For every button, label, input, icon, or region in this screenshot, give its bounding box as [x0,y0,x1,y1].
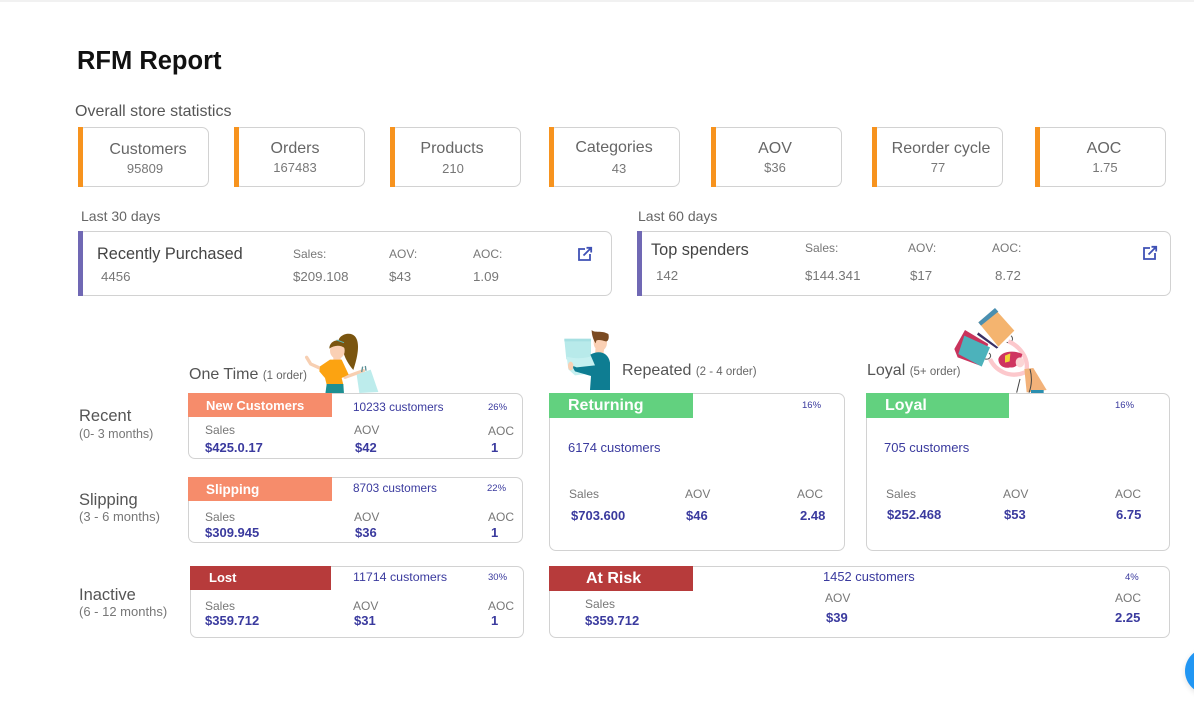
panel: loyal: 16% [1115,400,1134,411]
illustration: woman with shopping bag [305,334,378,393]
panel: at risk: At Risk [586,570,641,587]
panel: at risk: 2.25 [1115,610,1140,625]
stat card: categories: 43 [612,161,626,176]
panel: returning: $703.600 [571,508,625,523]
stat card: AOC [1035,127,1166,187]
row label: inactive: Inactive [79,586,136,604]
panel: top spenders: $17 [910,268,932,283]
panel: loyal [866,393,1170,551]
panel: slipping: 8703 customers [353,481,437,495]
title: RFM Report [77,47,221,75]
panel: new customers: 1 [491,440,498,455]
panel: lost: Sales [205,599,235,613]
stat card: reorder cycle: 77 [931,160,945,175]
panel: loyal: Sales [886,487,916,501]
panel: returning: AOV [685,487,710,501]
panel: at risk: $39 [826,610,848,625]
panel: new customers: AOV [354,423,379,437]
panel: recently purchased: Recently Purchased [97,245,243,263]
panel: slipping: AOV [354,510,379,524]
panel: slipping: $309.945 [205,525,259,540]
label: last 30 days: Last 30 days [81,208,160,224]
panel: new customers [188,393,523,459]
icon: external link [1143,246,1158,260]
icon: external link [578,246,592,261]
row label: slipping: Slipping [79,491,138,509]
heading: overall store statistics: Overall store statistics [75,103,231,120]
floating action button [1185,648,1194,694]
panel: recently purchased: $209.108 [293,269,348,284]
row label: slipping [79,491,160,524]
panel: returning: 2.48 [800,508,825,523]
stat card: customers: 95809 [127,161,163,176]
row label: recent [79,407,153,441]
panel: slipping: AOC [488,510,514,524]
panel: recently purchased: 1.09 [473,269,499,284]
panel: slipping: 1 [491,525,498,540]
stat card: AOV [711,127,842,187]
panel: top spenders: 8.72 [995,268,1021,283]
illustration: man carrying boxes [564,330,610,390]
heading: repeated: Repeated (2 - 4 order) [622,362,757,379]
panel: loyal: AOV [1003,487,1028,501]
panel: recently purchased: AOC: [473,247,502,261]
panel: loyal: $53 [1004,507,1026,522]
panel: new customers: Sales [205,423,235,437]
panel: at risk: AOV [825,591,850,605]
panel: top spenders: 142 [656,268,678,283]
stat card: AOV: AOV [758,140,792,157]
stat card: AOV: $36 [764,160,786,175]
panel: slipping: 22% [487,483,506,494]
panel: new customers: AOC [488,424,514,438]
panel: new customers: 26% [488,402,507,413]
panel: new customers: $42 [355,440,377,455]
stat card: AOC: 1.75 [1092,160,1118,175]
panel: loyal: Loyal [885,397,927,414]
row label: inactive [79,586,167,619]
panel: top spenders [637,231,1171,296]
panel: lost: 1 [491,613,498,628]
panel: lost: 11714 customers [353,570,447,584]
panel: returning: Sales [569,487,599,501]
heading: loyal: Loyal (5+ order) [867,362,961,379]
panel: recently purchased [78,231,612,296]
row label: recent: (0- 3 months) [79,427,153,441]
stat card: categories [549,127,680,187]
panel: returning: AOC [797,487,823,501]
stat card: reorder cycle: Reorder cycle [892,140,990,157]
panel: lost: Lost [209,570,236,585]
panel: slipping: Slipping [206,482,259,497]
stat card: products: 210 [442,161,464,176]
stat card: AOC: AOC [1087,140,1121,157]
panel: at risk: Sales [585,597,615,611]
panel: loyal: 705 customers [884,440,969,455]
stat card: products: Products [420,140,484,157]
panel: at risk: AOC [1115,591,1141,605]
illustration: shopper with bags [954,308,1047,393]
panel: top spenders: Top spenders [651,241,749,259]
panel: lost: 30% [488,572,507,583]
panel: new customers: $425.0.17 [205,440,263,455]
stat card: categories: Categories [575,139,653,156]
panel: at risk: $359.712 [585,613,639,628]
stat card: orders: 167483 [273,160,317,175]
panel: loyal: AOC [1115,487,1141,501]
panel: loyal: 6.75 [1116,507,1141,522]
panel: slipping: Sales [205,510,235,524]
stat card: products [390,127,521,187]
panel: at risk [549,566,1170,638]
panel: recently purchased: AOV: [389,247,417,261]
stat card: customers [78,127,209,187]
row label: recent: Recent [79,407,131,425]
panel: new customers: 10233 customers [353,400,444,414]
panel: recently purchased: $43 [389,269,411,284]
panel: slipping: $36 [355,525,377,540]
panel: recently purchased: 4456 [101,269,131,284]
panel: lost: AOC [488,599,514,613]
panel: returning: 16% [802,400,821,411]
top edge shadow [0,0,1194,2]
panel: at risk: 1452 customers [823,569,915,584]
panel: top spenders: Sales: [805,241,838,255]
panel: lost: AOV [353,599,378,613]
panel: new customers: New Customers [206,398,304,413]
panel: at risk: 4% [1125,572,1139,583]
panel: top spenders: AOC: [992,241,1021,255]
panel: returning: 6174 customers [568,440,660,455]
stat card: reorder cycle [872,127,1003,187]
row label: inactive: (6 - 12 months) [79,604,167,619]
heading: one time: One Time (1 order) [189,366,307,383]
panel: top spenders: AOV: [908,241,936,255]
stat card: orders: Orders [271,140,319,157]
stat card: customers: Customers [109,141,187,158]
panel: top spenders: $144.341 [805,268,860,283]
stat card: orders [234,127,365,187]
row label: slipping: (3 - 6 months) [79,509,160,524]
panel: slipping [188,477,523,543]
panel: lost [190,566,524,638]
panel: returning: $46 [686,508,708,523]
panel: lost: $359.712 [205,613,259,628]
panel: returning [549,393,845,551]
panel: returning: Returning [568,397,644,414]
label: last 60 days: Last 60 days [638,208,717,224]
panel: loyal: $252.468 [887,507,941,522]
panel: recently purchased: Sales: [293,247,326,261]
panel: lost: $31 [354,613,376,628]
